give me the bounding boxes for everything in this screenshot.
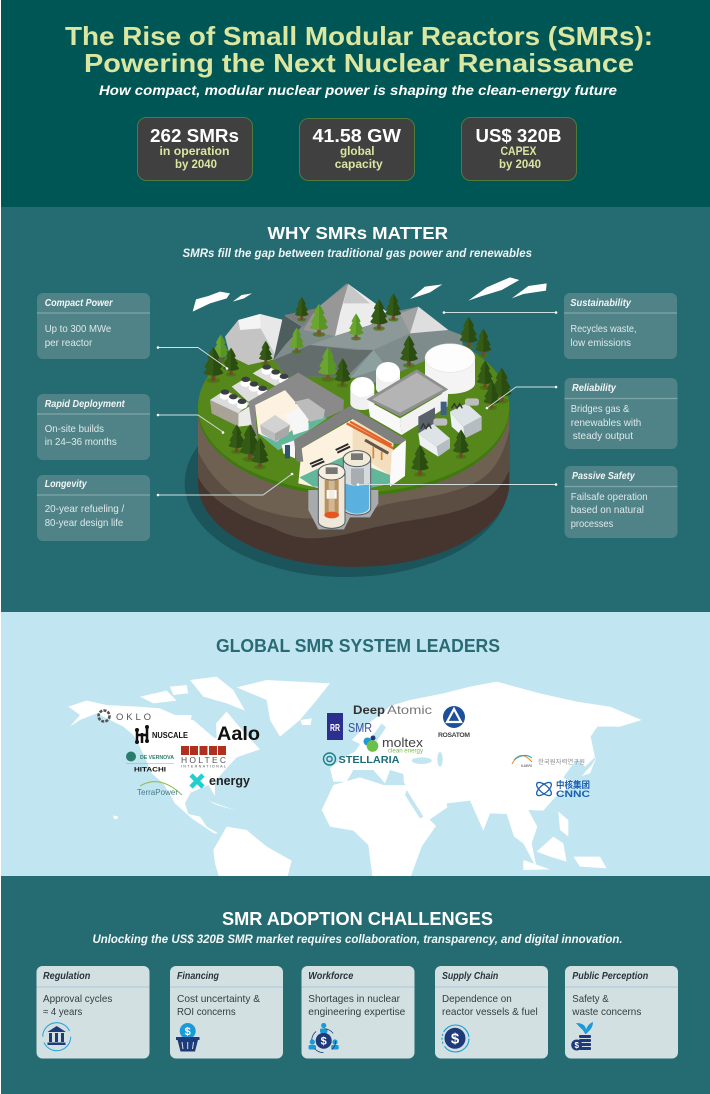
panel: regulation: ≈ 4 years [43, 1006, 82, 1018]
logo: Holtec International: INTERNATIONAL [181, 764, 226, 768]
turbine hall [248, 373, 344, 458]
transformers [418, 398, 482, 457]
logo: Moltex: moltex [382, 735, 424, 750]
heading: SMR adoption challenges: SMR ADOPTION CHALLENGES [222, 909, 493, 929]
panel: workforce: engineering expertise [308, 1006, 405, 1018]
logo: Deep Atomic [353, 703, 432, 717]
logo: Moltex: clean energy [388, 748, 423, 754]
panel: supply chain [435, 966, 548, 1058]
reactor building cutaway [294, 406, 407, 488]
world map [68, 677, 642, 883]
heading: why SMRs matter: WHY SMRs MATTER [268, 223, 448, 243]
connector: compact power [157, 346, 228, 370]
section: why SMRs matter background [1, 207, 710, 612]
panel: passive safety: Passive Safety [572, 471, 635, 482]
panel: rapid deployment: in 24–36 months [45, 436, 117, 448]
panel: rapid deployment [37, 394, 150, 460]
panel: financing [170, 966, 283, 1058]
icon: coin and basket: $ [185, 1026, 191, 1038]
logo: Rosatom [438, 706, 470, 739]
logo: Holtec International: HOLTEC [181, 755, 226, 765]
logo: KAERI: KAERI [521, 764, 532, 768]
panel: financing: ROI concerns [177, 1006, 236, 1018]
logo: Aalo: Aalo [217, 724, 260, 745]
logo: Rolls-Royce SMR: SMR [348, 721, 372, 735]
stat: 262 SMRs: 262 SMRs [150, 126, 239, 146]
panel: reliability [564, 378, 678, 449]
stat: 262 SMRs: in operation [160, 144, 230, 158]
stat: 262 SMRs: by 2040 [175, 157, 217, 171]
panel: supply chain: reactor vessels & fuel [442, 1006, 538, 1018]
logo: Rolls-Royce SMR [327, 713, 372, 740]
panel: compact power: Compact Power [45, 298, 114, 309]
icon: plant on coins: $ [574, 1041, 579, 1050]
logo: CNNC: CNNC [556, 789, 590, 800]
logo: Deep Atomic: Atomic [387, 703, 432, 717]
connector: reliability [486, 386, 557, 409]
logo: Oklo [98, 710, 151, 723]
logo: TerraPower: TerraPower [137, 788, 178, 797]
mountains [225, 283, 463, 383]
panel: compact power: per reactor [45, 337, 93, 349]
section: challenges background [1, 876, 710, 1094]
panel: passive safety: processes [571, 518, 613, 530]
stat: 262 SMRs [138, 118, 252, 180]
logo: NuScale [135, 725, 188, 744]
panel: workforce [302, 966, 414, 1058]
connector: passive safety [357, 483, 557, 486]
connector: longevity [157, 473, 293, 496]
stat: US$ 320B: US$ 320B [476, 126, 562, 146]
logo: Rosatom: ROSATOM [438, 732, 470, 739]
heading: global SMR system leaders: GLOBAL SMR SYSTEM LEADERS [216, 636, 500, 656]
panel: supply chain: Supply Chain [442, 971, 498, 982]
logo: TerraPower [137, 782, 182, 797]
panel: regulation: Approval cycles [43, 993, 112, 1005]
panel: longevity [37, 475, 150, 541]
connector: rapid deployment [157, 414, 224, 434]
title: The Rise of Small Modular Reactors (SMRs): [65, 21, 653, 51]
cooling units [210, 364, 289, 427]
panel: rapid deployment: Rapid Deployment [45, 399, 125, 410]
panel: passive safety [564, 466, 678, 538]
logo: KAERI: 한국원자력연구원 [538, 758, 585, 766]
logo: Deep Atomic: Deep [353, 703, 385, 717]
logo: GE Vernova Hitachi [126, 752, 174, 774]
section: global leaders background [1, 612, 710, 876]
panel: longevity: Longevity [45, 479, 87, 490]
logo: Stellaria: STELLARIA [338, 755, 400, 766]
panel: sustainability: Sustainability [570, 298, 631, 309]
clouds [193, 277, 547, 312]
stat: 41.58 GW: global [340, 144, 374, 158]
logo: CNNC [535, 779, 590, 800]
stat: 41.58 GW: capacity [335, 157, 383, 171]
panel: passive safety: based on natural [571, 504, 644, 516]
logo: Moltex [364, 735, 424, 754]
logo: Stellaria [324, 753, 400, 766]
stat: 41.58 GW: 41.58 GW [312, 126, 401, 146]
reactor vessels [308, 451, 378, 529]
panel: reliability: Reliability [572, 383, 616, 394]
panel: financing: Financing [177, 971, 219, 982]
stat: US$ 320B: CAPEX [500, 144, 536, 158]
logo: GE Vernova Hitachi: DE VERNOVA [140, 755, 174, 761]
panel: regulation [36, 966, 150, 1058]
panel: financing: Cost uncertainty & [177, 993, 260, 1005]
panel: passive safety: Failsafe operation [571, 491, 648, 503]
panel: sustainability: low emissions [570, 337, 631, 349]
icon: dollar cycle: $ [451, 1030, 460, 1048]
storage tanks [350, 344, 475, 410]
panel: rapid deployment: On-site builds [45, 423, 104, 435]
panel: longevity: 80-year design life [45, 517, 123, 529]
panel: longevity: 20-year refueling / [45, 503, 124, 515]
logo: X-energy: energy [209, 773, 251, 788]
icon: people around dollar: $ [321, 1036, 327, 1048]
panel: regulation: Regulation [43, 971, 90, 982]
logo: CNNC: 中核集团 [556, 779, 590, 790]
logo: X-energy [191, 773, 251, 788]
stat: 41.58 GW [300, 118, 414, 180]
panel: reliability: Bridges gas & [571, 403, 629, 415]
subheading: why SMRs matter: SMRs fill the gap between traditional gas power and renewables [182, 248, 532, 260]
panel: reliability: steady output [573, 430, 633, 442]
connector: sustainability [443, 311, 557, 314]
panel: workforce: Workforce [308, 971, 354, 982]
panel: public perception: Safety & [572, 993, 609, 1005]
logo: Rolls-Royce SMR: RR [330, 723, 341, 734]
panel: supply chain: Dependence on [442, 993, 512, 1005]
logo: Oklo: OKLO [116, 712, 151, 723]
logo: KAERI [512, 755, 585, 768]
icon: bank with cycle arrows [43, 1023, 71, 1051]
logo: Holtec International [181, 746, 226, 768]
panel: compact power: Up to 300 MWe [45, 323, 111, 335]
service building [367, 369, 448, 435]
panel: reliability: renewables with [571, 417, 641, 429]
panel: sustainability: Recycles waste, [570, 323, 636, 335]
subtitle: How compact, modular nuclear power is shaping the clean-energy future [99, 82, 617, 98]
panel: sustainability [564, 293, 677, 359]
panel: public perception [565, 966, 678, 1058]
panel: public perception: waste concerns [571, 1006, 641, 1018]
title: Powering the Next Nuclear Renaissance [84, 48, 634, 78]
panel: public perception: Public Perception [572, 971, 648, 982]
panel: workforce: Shortages in nuclear [308, 993, 400, 1005]
section: header background [1, 0, 710, 207]
subheading: challenges: Unlocking the US$ 320B SMR market requires collaboration, transparency, and digital innovation. [92, 934, 622, 946]
stat: US$ 320B [462, 118, 576, 180]
illustration: isometric SMR island [185, 277, 547, 577]
logo: NuScale: NUSCALE [152, 730, 188, 740]
stat: US$ 320B: by 2040 [499, 157, 541, 171]
title [65, 21, 653, 78]
panel: compact power [37, 293, 150, 359]
logo: GE Vernova Hitachi: HITACHI [134, 766, 166, 774]
